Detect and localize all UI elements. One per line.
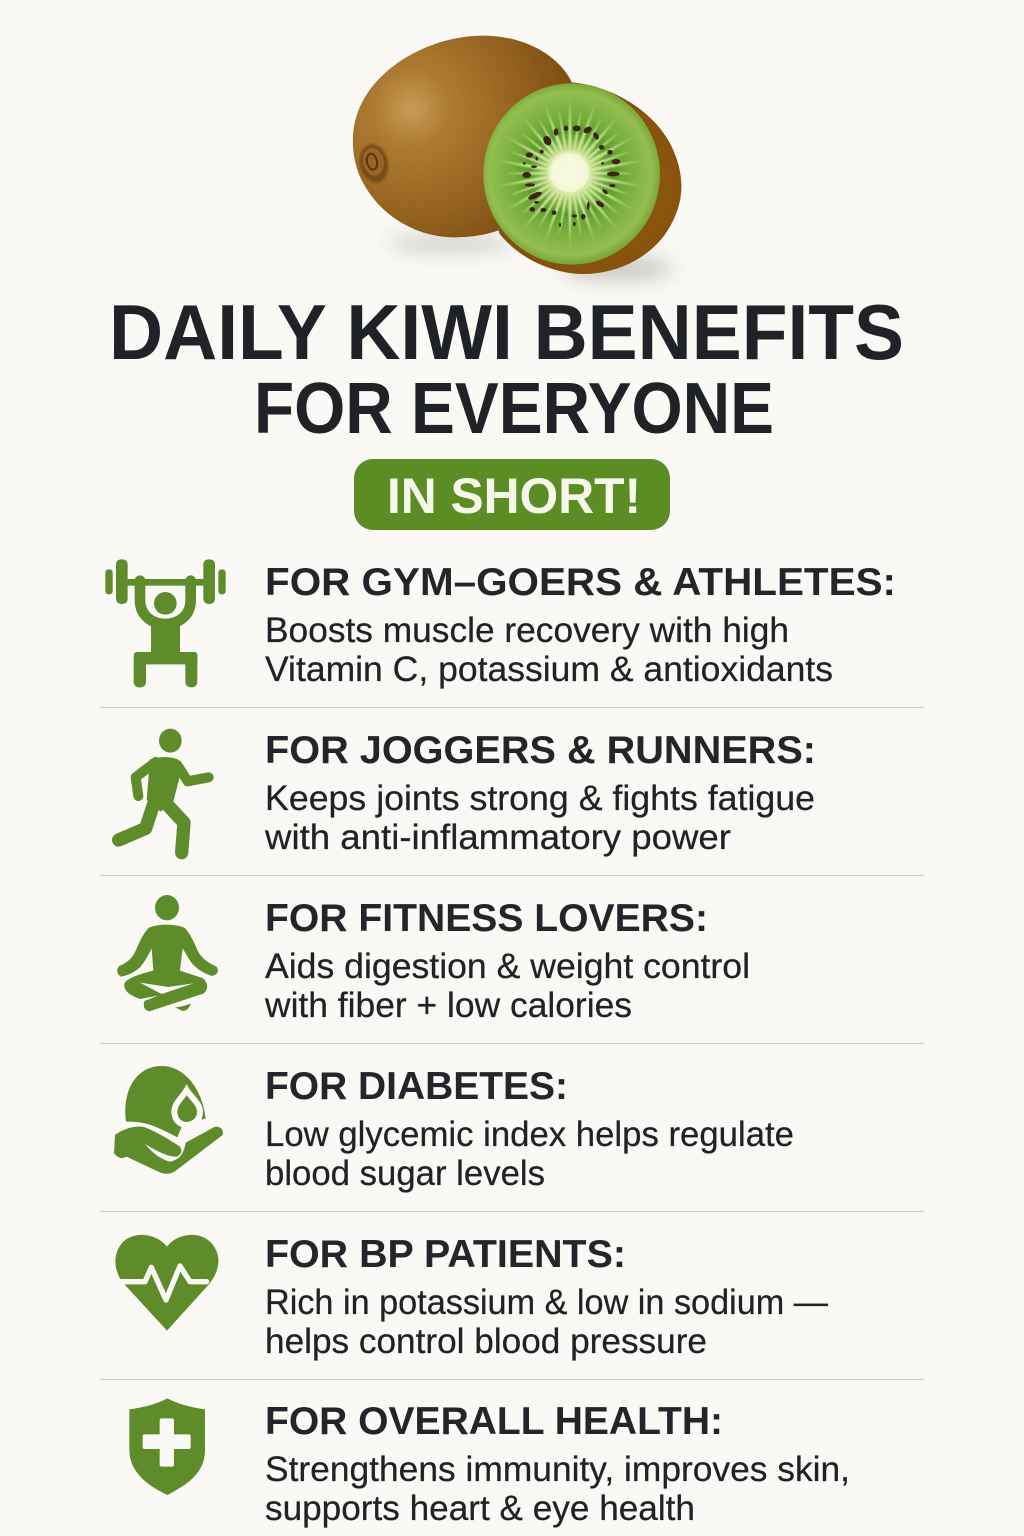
whole kiwi bbox=[353, 36, 572, 237]
text: diabetes benefit: Low glycemic index helps regulate bbox=[265, 1115, 794, 1154]
icon: heart with pulse bbox=[115, 1235, 218, 1331]
kiwi core bbox=[545, 148, 594, 197]
text: overall benefit: Strengthens immunity, improves skin, bbox=[265, 1450, 850, 1489]
heading: gym-goers: FOR GYM–GOERS & ATHLETES: bbox=[265, 561, 896, 604]
cut kiwi flesh bbox=[483, 83, 660, 265]
text: fitness benefit: Aids digestion & weight control bbox=[265, 947, 750, 986]
title line 1: DAILY KIWI BENEFITS bbox=[109, 288, 904, 376]
illustration: kiwi fruit bbox=[353, 36, 681, 279]
kiwi seeds bbox=[522, 125, 620, 227]
text: joggers benefit: with anti-inflammatory power bbox=[264, 818, 731, 857]
row: overall health bbox=[129, 1398, 850, 1528]
icon: hand with drop bbox=[114, 1066, 223, 1174]
icon: meditation bbox=[117, 895, 218, 1011]
text: bp benefit bbox=[265, 1283, 828, 1361]
icon: runner bbox=[119, 729, 209, 853]
text: gym-goers benefit bbox=[265, 611, 833, 689]
heading: overall health: FOR OVERALL HEALTH: bbox=[265, 1400, 723, 1443]
heading: diabetes: FOR DIABETES: bbox=[265, 1065, 568, 1108]
row: bp patients bbox=[115, 1233, 828, 1361]
heading: fitness lovers: FOR FITNESS LOVERS: bbox=[265, 897, 708, 940]
text: gym-goers benefit: Boosts muscle recovery with high bbox=[265, 611, 789, 650]
text: fitness benefit bbox=[264, 947, 750, 1025]
icon: weightlifter bbox=[105, 559, 226, 687]
text: bp benefit: helps control blood pressure bbox=[265, 1322, 707, 1361]
kiwi rays bbox=[499, 101, 641, 246]
badge: in short: IN SHORT! bbox=[387, 468, 641, 524]
cut kiwi back skin bbox=[487, 82, 681, 274]
heading: joggers: FOR JOGGERS & RUNNERS: bbox=[265, 729, 816, 772]
title bbox=[109, 288, 904, 449]
heading: bp patients: FOR BP PATIENTS: bbox=[265, 1233, 626, 1276]
text: fitness benefit: with fiber + low calories bbox=[264, 986, 632, 1025]
text: overall benefit: supports heart & eye health bbox=[265, 1489, 695, 1528]
ground shadow bbox=[387, 237, 673, 279]
text: joggers benefit bbox=[264, 779, 815, 857]
row: diabetes bbox=[114, 1065, 794, 1193]
text: bp benefit: Rich in potassium & low in sodium — bbox=[265, 1283, 828, 1322]
title line 2: FOR EVERYONE bbox=[254, 369, 774, 449]
text: diabetes benefit: blood sugar levels bbox=[265, 1154, 545, 1193]
row: joggers and runners bbox=[119, 729, 816, 857]
row: fitness lovers bbox=[117, 895, 750, 1025]
badge: in short bbox=[354, 459, 670, 530]
icon: shield with cross bbox=[129, 1398, 205, 1495]
row: gym-goers and athletes bbox=[105, 559, 896, 689]
text: gym-goers benefit: Vitamin C, potassium & antioxidants bbox=[265, 650, 833, 689]
text: overall benefit bbox=[265, 1450, 850, 1528]
text: diabetes benefit bbox=[265, 1115, 794, 1193]
text: joggers benefit: Keeps joints strong & fights fatigue bbox=[265, 779, 815, 818]
